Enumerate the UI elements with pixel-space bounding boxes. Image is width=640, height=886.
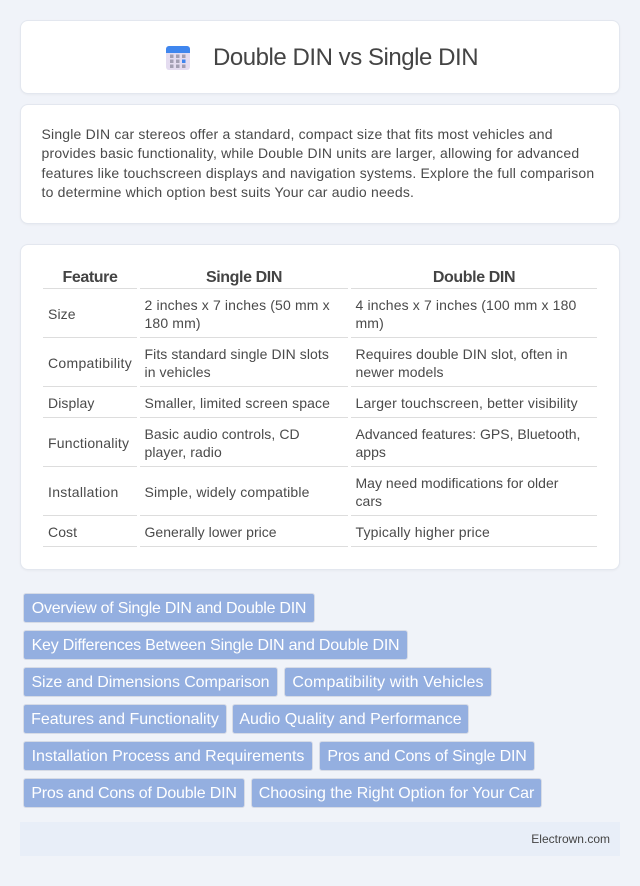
tag: Compatibility with Vehicles (292, 674, 484, 691)
panel: comparison table (20, 244, 620, 570)
tag: Pros and Cons of Double DIN (31, 785, 237, 802)
row: compatibility: in vehicles (144, 364, 211, 380)
tag (23, 778, 245, 808)
description card (20, 104, 620, 224)
description text: Single DIN car stereos offer a standard, compact size that fits most vehicles and (42, 126, 553, 142)
row: cost: Generally lower price (144, 524, 277, 540)
row: functionality: apps (356, 444, 386, 460)
description text (42, 126, 594, 200)
description text: to determine which option best suits Your car audio needs. (42, 184, 414, 200)
row: cost (48, 524, 490, 540)
row: compatibility: Compatibility (48, 355, 132, 371)
table header row: Single DIN (206, 269, 282, 286)
row: installation: May need modifications for older (356, 475, 558, 491)
tag (319, 741, 535, 771)
icon: calendar grid (166, 46, 190, 70)
tag (23, 667, 278, 697)
tag (23, 593, 315, 623)
tag: Overview of Single DIN and Double DIN (32, 600, 306, 617)
tag: Pros and Cons of Single DIN (327, 748, 527, 765)
tag (23, 741, 313, 771)
row: size: 2 inches x 7 inches (50 mm x (144, 297, 330, 313)
row: display (48, 395, 578, 411)
row: functionality: Basic audio controls, CD (144, 426, 300, 442)
row: cost: Typically higher price (356, 524, 490, 540)
row: installation: Installation (48, 484, 119, 500)
row: size: Size (48, 306, 76, 322)
row: size (48, 297, 576, 331)
row: functionality: Functionality (48, 435, 129, 451)
row: compatibility: newer models (356, 364, 444, 380)
tag: Installation Process and Requirements (32, 748, 304, 765)
tag (232, 704, 469, 734)
tag: Audio Quality and Performance (239, 711, 462, 728)
row: display: Larger touchscreen, better visibility (356, 395, 578, 411)
tag: Key Differences Between Single DIN and Double DIN (32, 637, 399, 654)
tag (284, 667, 492, 697)
row: functionality: player, radio (144, 444, 222, 460)
row: installation: cars (356, 493, 382, 509)
panel: topic tags (23, 593, 542, 808)
tag: Choosing the Right Option for Your Car (259, 785, 534, 802)
row: display: Display (48, 395, 94, 411)
footer brand text: Electrown.com (531, 832, 610, 846)
description text: provides basic functionality, while Double DIN units are larger, allowing for advanced (42, 145, 579, 161)
table header row (62, 269, 515, 286)
header card (20, 20, 620, 94)
tag (23, 630, 408, 660)
description text: features like touchscreen displays and navigation systems. Explore the full comparison (42, 165, 594, 181)
row: installation: Simple, widely compatible (144, 484, 310, 500)
row: size: 180 mm) (144, 315, 201, 331)
row: compatibility (48, 346, 568, 380)
tag (23, 704, 227, 734)
title: Double DIN vs Single DIN (213, 44, 478, 71)
tag (251, 778, 542, 808)
row: functionality (48, 426, 580, 460)
row: compatibility: Requires double DIN slot, often in (356, 346, 568, 362)
footer (20, 822, 620, 856)
tag: Features and Functionality (31, 711, 219, 728)
tag: Size and Dimensions Comparison (31, 674, 270, 691)
table header row: Feature (62, 269, 118, 286)
row: size: 4 inches x 7 inches (100 mm x 180 (356, 297, 576, 313)
row: installation (48, 475, 558, 509)
table header row: Double DIN (433, 269, 515, 286)
row: display: Smaller, limited screen space (144, 395, 330, 411)
row: functionality: Advanced features: GPS, Bluetooth, (356, 426, 580, 442)
row: compatibility: Fits standard single DIN slots (144, 346, 329, 362)
row: size: mm) (356, 315, 384, 331)
row: cost: Cost (48, 524, 77, 540)
